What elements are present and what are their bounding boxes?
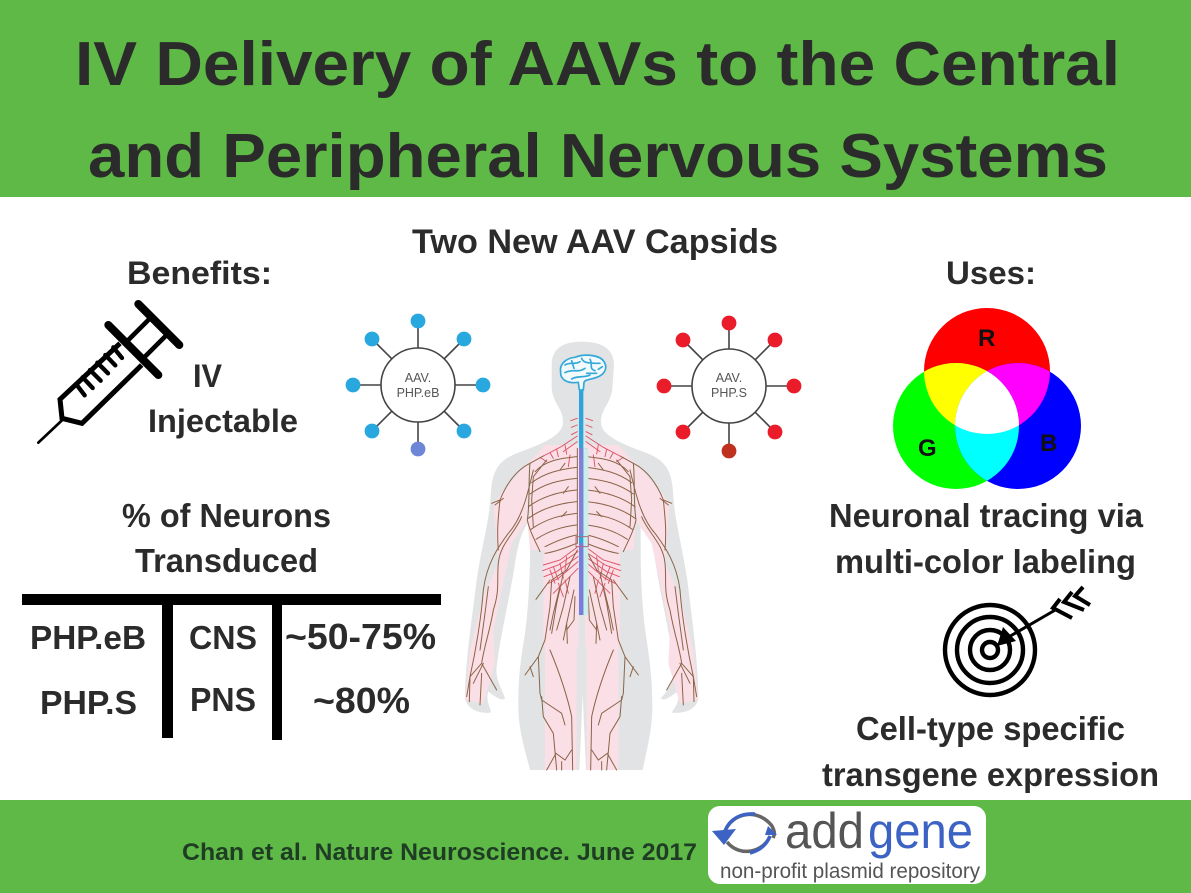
heading: percent of neurons transduced: Transduced <box>135 542 318 579</box>
table: neurons transduced: PHP.eB <box>30 619 146 656</box>
text: neuronal tracing: multi-color labeling <box>835 543 1136 580</box>
table: neurons transduced <box>22 594 441 740</box>
citation: Chan et al. Nature Neuroscience. June 2017 <box>182 839 697 866</box>
table: neurons transduced: PHP.S <box>40 684 137 721</box>
benefit label: IV injectable <box>148 358 298 439</box>
body silhouette <box>465 342 698 770</box>
heading: benefits: Benefits: <box>127 255 272 291</box>
table: neurons transduced: CNS <box>189 619 257 656</box>
chart: RGB Venn diagram: B <box>1040 430 1057 457</box>
icon: target with arrow <box>945 587 1090 695</box>
spinal cord <box>576 390 588 615</box>
nerves <box>467 418 697 770</box>
figure: human nervous system <box>465 342 698 770</box>
heading: percent of neurons transduced: % of Neurons <box>122 497 331 534</box>
logo: addgene: add <box>785 803 864 859</box>
title: and Peripheral Nervous Systems <box>88 122 1108 191</box>
heading: percent of neurons transduced <box>122 497 331 579</box>
benefit label: IV injectable: IV <box>193 358 223 394</box>
table: neurons transduced: PNS <box>190 681 256 718</box>
pink nerve tint <box>465 445 698 770</box>
capsid: AAV PHP.eB: AAV. <box>405 371 431 385</box>
chart: RGB Venn diagram: R <box>978 325 995 352</box>
text: neuronal tracing <box>829 497 1144 580</box>
heading: two new capsids: Two New AAV Capsids <box>412 223 778 261</box>
table: neurons transduced: ~50-75% <box>285 616 436 657</box>
heading: uses: Uses: <box>946 255 1036 291</box>
chart: RGB Venn diagram <box>893 308 1081 489</box>
capsid: AAV PHP.eB: PHP.eB <box>397 386 439 400</box>
title band <box>0 0 1191 197</box>
title: IV Delivery of AAVs to the Central <box>75 30 1120 99</box>
icon: circular arrows <box>712 814 777 853</box>
text: cell-type specific expression: transgene expression <box>822 756 1159 793</box>
capsid: AAV PHP.S <box>657 316 801 458</box>
text: cell-type specific expression <box>822 710 1159 793</box>
text: neuronal tracing: Neuronal tracing via <box>829 497 1144 534</box>
capsid: AAV PHP.eB <box>346 314 490 456</box>
logo: addgene: gene <box>868 803 973 859</box>
benefit label: IV injectable: Injectable <box>148 403 298 439</box>
capsid: AAV PHP.S: AAV. <box>716 371 742 385</box>
footer band <box>0 800 1191 893</box>
table: neurons transduced: ~80% <box>313 680 410 721</box>
icon: syringe <box>38 304 179 443</box>
title <box>75 30 1120 191</box>
icon: brain <box>560 355 606 390</box>
logo: addgene: non-profit plasmid repository <box>720 860 980 883</box>
text: cell-type specific expression: Cell-type specific <box>856 710 1125 747</box>
chart: RGB Venn diagram: G <box>918 435 937 462</box>
logo: addgene <box>708 803 986 884</box>
capsid: AAV PHP.S: PHP.S <box>711 386 747 400</box>
